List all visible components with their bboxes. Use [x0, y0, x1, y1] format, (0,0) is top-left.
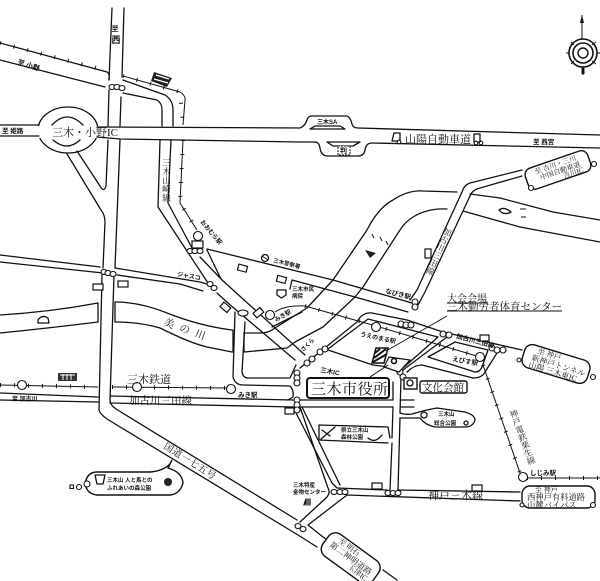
rail: north rail line [123, 76, 197, 230]
icon: 文化会館 sign: 文化会館 [422, 381, 464, 394]
icon: 三木鉄道 train [58, 373, 77, 381]
label: しじみ駅: しじみ駅 [530, 469, 556, 477]
label: 三木SA: 三木SA [317, 118, 338, 126]
icon: 大会会場 hatched building [372, 348, 388, 363]
label: 三木・小野IC: 三木・小野IC [52, 125, 118, 139]
label: 三木鉄道: 三木鉄道 [127, 372, 171, 386]
label: 判: 判 [340, 146, 347, 155]
label: 国道一七五号: 国道一七五号 [161, 440, 219, 482]
label: 加古川三田線 east: 加古川三田線 [455, 331, 496, 350]
callout: 至 神戸 西神戸有料道路 山麓バイパス [520, 485, 596, 510]
callout: 至 吉川・三川 中国自動車道 [523, 149, 596, 191]
road: 三木警察署 road [207, 249, 412, 312]
road: east central block [300, 313, 522, 368]
callout: 至 明石 第二神明道路 三木IC: 至 明石 [337, 536, 362, 558]
road: 小野 road [0, 43, 109, 87]
icon: factory top left [151, 72, 172, 87]
label: 至 加古川: 至 加古川 [12, 395, 38, 403]
label: うえのまる駅: うえのまる駅 [360, 330, 396, 345]
icon: 市役所 marker [384, 357, 410, 372]
road: 加古川三田線 north [410, 170, 522, 305]
label: 金物センター: 金物センター [293, 488, 326, 496]
callout: 至 明石 第二神明道路 三木IC: 第二神明道路 [328, 540, 375, 577]
label: 至 西脇: 至 [112, 25, 118, 33]
interchange signals [101, 84, 506, 532]
callout: 至 神戸 新神戸トンネル 三木東IC [517, 343, 596, 385]
stations [18, 232, 528, 482]
label: おおむら駅: おおむら駅 [198, 219, 223, 246]
callout: 大会会場 三木勤労者体育センター [386, 292, 562, 351]
icon: compass [566, 15, 600, 75]
callout: 県立三木山森林公園: 県立三木山 [341, 426, 369, 434]
icon: fish in river north [365, 234, 388, 258]
label: さくら: さくら [299, 337, 316, 353]
icon: hospital shield [277, 290, 286, 298]
icon: turtle in river [38, 316, 49, 323]
icon: 金物センター mark [304, 499, 310, 505]
road: みき駅 loop [233, 312, 296, 400]
callout: 三木山総合公園: 三木山 [438, 410, 455, 418]
label: 至 姫路: 至 姫路 [2, 126, 24, 135]
rail: 神戸電鉄粟生線 [275, 306, 600, 478]
callout: 至 明石 第二神明道路 三木IC [318, 529, 384, 581]
callout: 三木山総合公園 [400, 408, 475, 427]
railways [0, 43, 600, 482]
label: 至 西宮: 至 西宮 [533, 137, 555, 146]
callout: 至 神戸 西神戸有料道路 山麓バイパス: 西神戸有料道路 [527, 492, 586, 502]
callout: 三木山総合公園: 総合公園 [434, 419, 457, 427]
road: 加古川三田線 [0, 393, 414, 407]
rail: 小野 rail [0, 43, 108, 71]
label: 加古川三田線 north: 加古川三田線 [423, 225, 454, 278]
label: 神戸電鉄粟生線: 神戸電鉄粟生線 [508, 408, 537, 467]
label: 加古川三田線: 加古川三田線 [129, 394, 192, 407]
road: north-south main road east side [110, 8, 297, 520]
road labels: 西 [111, 35, 121, 45]
label: 三木IC 付近: 三木IC [320, 365, 341, 377]
road: north-south main road [67, 8, 317, 547]
label: 山陽自動車道: 山陽自動車道 [405, 132, 471, 146]
road: west-east lower left [0, 255, 207, 291]
icon: truck west of 山陽自動車道 [392, 133, 401, 144]
river: 美の川 [0, 191, 600, 352]
label: えびす駅: えびす駅 [452, 354, 479, 368]
callout: 県立三木山森林公園 [319, 425, 390, 443]
label: みき駅: みき駅 [238, 391, 258, 399]
road: central diagonal [200, 250, 305, 360]
icon: 文化会館 sign [404, 378, 467, 394]
callout: 県立三木山森林公園: 森林公園 [341, 433, 364, 441]
road: south diagonal [293, 407, 387, 490]
callout: 三木山 人と馬とのふれあいの森公園: 三木山 人と馬との [107, 476, 153, 484]
road labels [2, 25, 556, 502]
callout: 大会会場 三木勤労者体育センター: 三木勤労者体育センター [447, 300, 562, 313]
label: 三木警察署: 三木警察署 [273, 256, 302, 271]
rail: 三木鉄道 [0, 385, 227, 388]
road: to 三木山崎線 [123, 80, 208, 283]
callout: 至 吉川・三川 中国自動車道: 吉川IC [562, 165, 585, 180]
road: hospital access road [272, 312, 302, 327]
callout: 三木山 人と馬とのふれあいの森公園: ふれあいの森公園 [107, 484, 152, 492]
callout: 至 神戸 新神戸トンネル 三木東IC: 山陽 三木東IC [527, 359, 578, 384]
label: 至 小野: 至 小野 [16, 57, 41, 73]
callout: 至 神戸 新神戸トンネル 三木東IC: 新神戸トンネル [530, 352, 587, 378]
callout: 大会会場 三木勤労者体育センター: 大会会場 [447, 292, 487, 305]
callout: 至 吉川・三川 中国自動車道: 至 吉川・三川 [533, 153, 577, 176]
label: 神戸三木線: 神戸三木線 [428, 488, 483, 502]
callout: 三木市役所 [307, 365, 389, 398]
callout: 三木山 人と馬とのふれあいの森公園 [70, 460, 183, 495]
icon: 三木警察署 mark [262, 254, 268, 262]
callout: 至 神戸 西神戸有料道路 山麓バイパス: 山麓バイパス [527, 500, 577, 510]
callout: 至 吉川・三川 中国自動車道: 中国自動車道 [539, 160, 582, 182]
label: 三木市民病院: 三木市民 [292, 285, 315, 293]
callout: 至 神戸 新神戸トンネル 三木東IC: 至 神戸 [536, 345, 563, 362]
label: 三木山崎線: 三木山崎線 [161, 158, 171, 203]
road: 三木市役所 south [390, 378, 401, 490]
label: 美の川: 美の川 [162, 316, 213, 345]
callout: 三木市役所: 三木市役所 [311, 381, 389, 398]
callout: 至 神戸 西神戸有料道路 山麓バイパス: 至 神戸 [535, 485, 558, 494]
label: ジャスコ: ジャスコ [177, 271, 201, 282]
expressway and interchange [0, 107, 600, 156]
label: 三木特産金物センター: 三木特産 [293, 481, 316, 489]
label: なびき駅: なびき駅 [385, 286, 412, 301]
icon: fish in river east [499, 208, 526, 217]
label: 病院: 病院 [292, 292, 304, 300]
icon: truck east of 山陽自動車道 [474, 134, 483, 145]
label: みき駅 station north: みき駅 [274, 309, 293, 324]
signal boxes [93, 241, 489, 491]
